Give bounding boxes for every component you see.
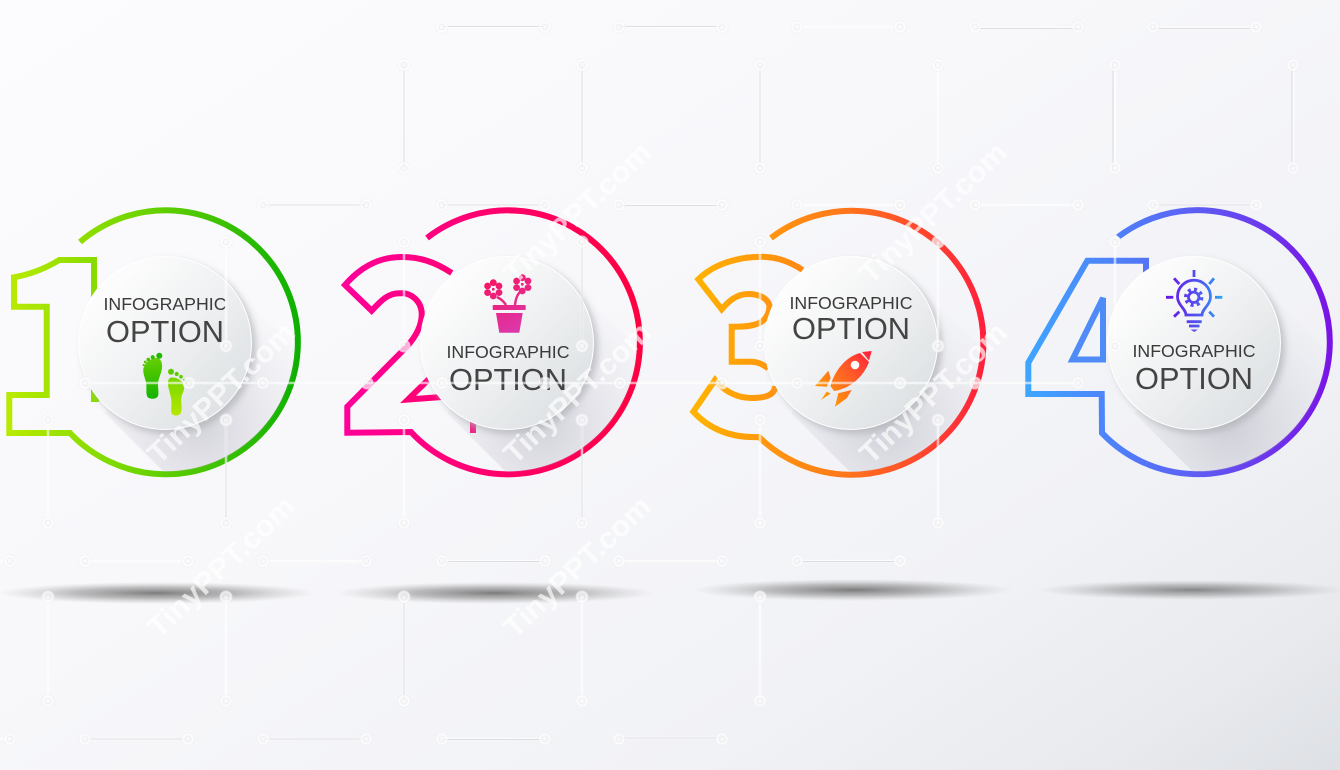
- number 3 outline with ring: [693, 211, 983, 475]
- watermarks: TinyPPT.com: [497, 136, 658, 290]
- long shadow: [450, 350, 638, 472]
- panel: option 4: [1025, 207, 1333, 478]
- watermarks: TinyPPT.com: [141, 316, 302, 470]
- text: infographic option: INFOGRAPHIC: [104, 294, 227, 314]
- disc shadow: [768, 260, 942, 434]
- icon: flower pot: [484, 274, 531, 333]
- disc shadow: [424, 260, 598, 434]
- text: infographic option: OPTION: [1135, 361, 1253, 396]
- text: infographic option: INFOGRAPHIC: [446, 342, 570, 362]
- disc: [764, 256, 938, 430]
- disc shadow: [1111, 260, 1285, 434]
- watermarks: TinyPPT.com: [853, 316, 1014, 470]
- long shadow: [795, 357, 980, 472]
- panel: option 3: [690, 208, 986, 478]
- text: infographic option: INFOGRAPHIC: [790, 293, 913, 313]
- long shadow: [108, 350, 296, 472]
- watermarks: TinyPPT.com: [497, 316, 658, 470]
- disc: [420, 256, 594, 430]
- disc shadow: [82, 260, 256, 434]
- watermarks: TinyPPT.com: [853, 136, 1014, 290]
- text: infographic option: OPTION: [792, 311, 910, 346]
- icon: rocket: [815, 351, 872, 407]
- floor shadows: [0, 579, 1340, 604]
- panel: option 2: [340, 207, 643, 478]
- text: infographic option: [1132, 341, 1256, 396]
- text: infographic option: [104, 294, 227, 349]
- disc: [1108, 256, 1280, 430]
- text: infographic option: [790, 293, 913, 346]
- panel: option 1: [6, 207, 301, 478]
- number 3 upper stroke: [698, 257, 803, 368]
- text: infographic option: OPTION: [449, 362, 567, 397]
- long shadow: [1140, 356, 1327, 472]
- number 2 inner stroke: [408, 378, 473, 433]
- watermarks: TinyPPT.com: [497, 490, 658, 644]
- text: infographic option: [446, 342, 570, 397]
- icon: footprints: [143, 353, 187, 416]
- number 2 outline with ring: [345, 210, 640, 474]
- text: infographic option: INFOGRAPHIC: [1132, 341, 1256, 361]
- text: infographic option: OPTION: [106, 314, 224, 349]
- number 4 outline with ring: [1028, 210, 1330, 474]
- disc: [78, 256, 252, 430]
- number 4 inner triangle: [1072, 298, 1103, 360]
- number 1 outline with ring: [9, 210, 298, 474]
- watermarks: [141, 136, 1014, 644]
- icon: light bulb with gear: [1166, 270, 1222, 332]
- watermarks: TinyPPT.com: [141, 490, 302, 644]
